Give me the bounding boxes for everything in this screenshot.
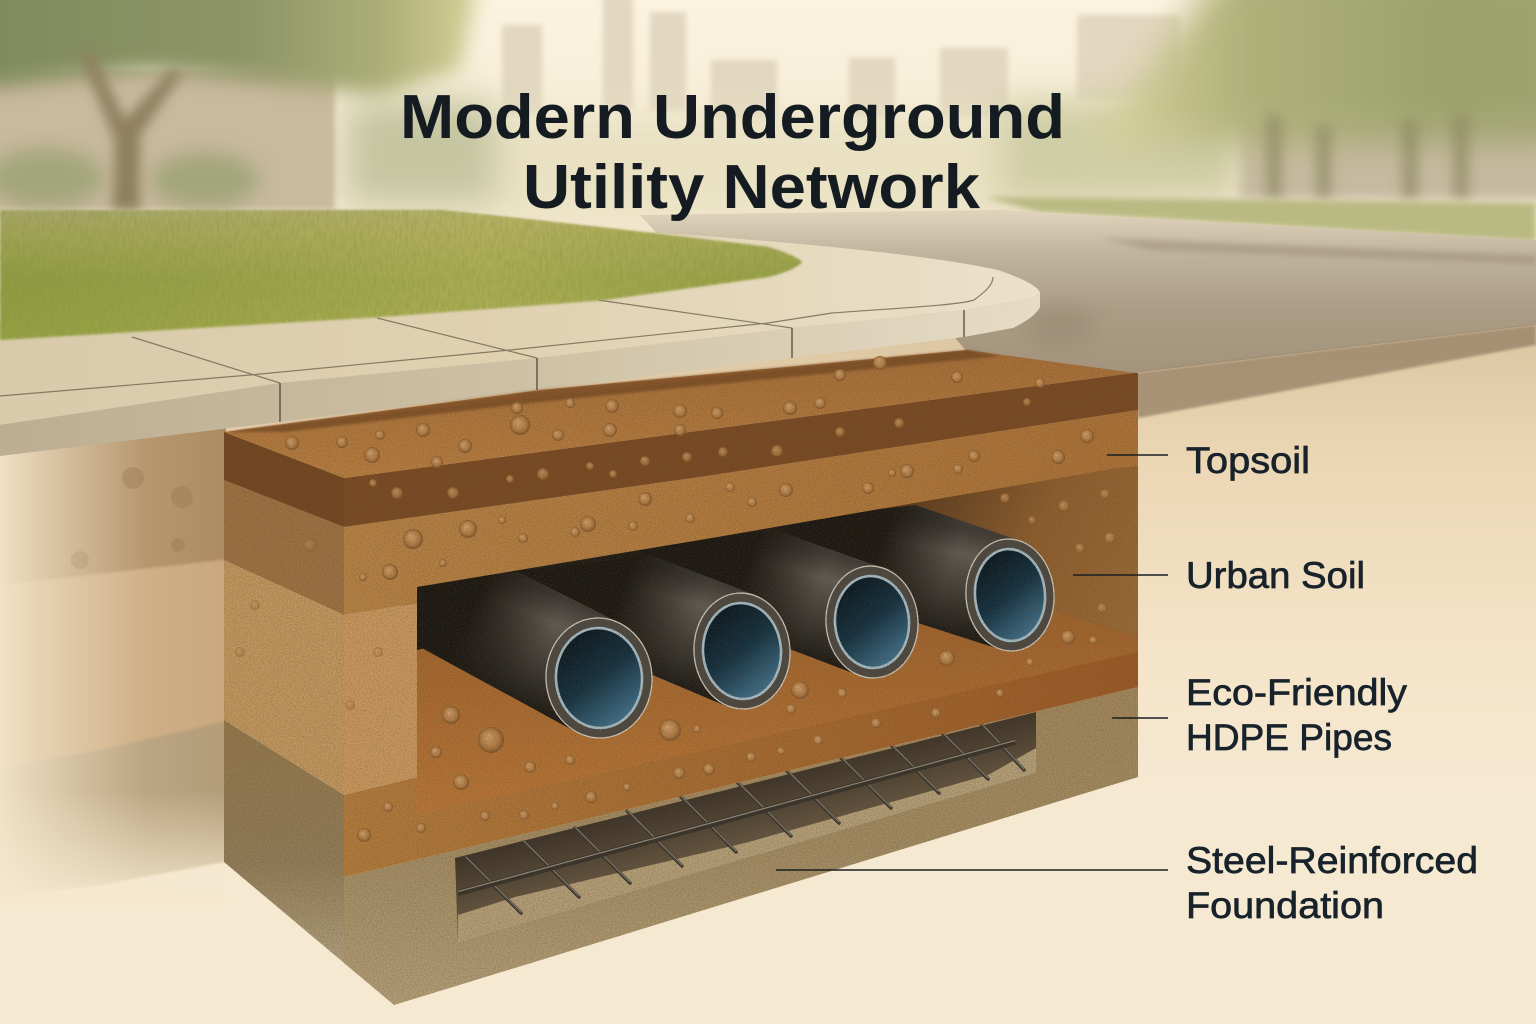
trench cross-section block — [200, 340, 1160, 1020]
foundation recess — [455, 712, 1036, 943]
pipe 3 — [640, 530, 922, 681]
title — [400, 83, 1065, 222]
paving joints — [0, 277, 993, 422]
pipe 1 — [400, 573, 656, 742]
urban band pebbles — [359, 429, 1094, 581]
curb front face — [0, 293, 1040, 456]
topsoil band pebbles — [303, 398, 1031, 552]
label: steel-reinforced foundation: Foundation — [1186, 885, 1384, 926]
topsoil left face — [224, 432, 344, 527]
recess sand strip — [458, 748, 1036, 943]
right trees — [1090, 0, 1536, 200]
hazy middle ground — [345, 100, 1240, 215]
soil grain texture — [200, 340, 1160, 1020]
label: urban soil: Urban Soil — [1186, 555, 1365, 596]
left building — [0, 70, 335, 210]
lawn — [0, 205, 810, 345]
road front cut face — [1133, 325, 1536, 418]
title: Utility Network — [523, 153, 981, 222]
urban soil front band — [344, 410, 1138, 615]
HDPE pipes — [400, 505, 1058, 742]
pipe 2 — [520, 555, 794, 712]
left cut-away wall — [0, 420, 240, 905]
left tree — [0, 0, 480, 210]
background scenery: distant city, trees and lawn — [0, 0, 1536, 242]
label: steel-reinforced foundation: Steel-Reinforced — [1186, 840, 1478, 881]
road — [640, 210, 1536, 418]
medium soil left face — [224, 480, 344, 615]
top surface pebbles — [285, 356, 1045, 468]
right lawn strip — [985, 197, 1536, 242]
foundation left face — [224, 720, 394, 1005]
back wall — [880, 460, 1138, 637]
label: eco-friendly HDPE pipes: HDPE Pipes — [1186, 717, 1392, 758]
pipe 4 — [790, 505, 1058, 654]
soil pebbles — [235, 356, 1116, 842]
label: steel-reinforced foundation — [776, 840, 1478, 926]
sidewalk top surface — [0, 232, 1040, 425]
label: eco-friendly HDPE pipes: Eco-Friendly — [1186, 672, 1408, 713]
floor pebbles — [430, 630, 1097, 790]
back wall pebbles — [1000, 489, 1116, 613]
foundation front face — [344, 687, 1138, 1005]
light soil front column — [344, 603, 417, 795]
hedges — [0, 148, 260, 208]
floor and front soil band — [344, 560, 1138, 877]
opening backdrop — [417, 460, 1138, 790]
distant city skyline — [502, 0, 1180, 120]
dark shadow along curb — [224, 350, 1000, 432]
label: topsoil: Topsoil — [1186, 440, 1310, 481]
label: eco-friendly HDPE pipes — [1112, 672, 1408, 758]
topsoil front band — [344, 373, 1138, 527]
topsoil top surface — [224, 350, 1133, 478]
light soil left face — [224, 560, 344, 795]
column pebbles — [235, 600, 383, 710]
steel reinforcement mesh — [458, 723, 1024, 913]
sidewalk and curb — [0, 232, 1040, 456]
front band pebbles — [357, 689, 1004, 842]
lower ground tone — [0, 325, 1536, 1024]
title: Modern Underground — [400, 83, 1065, 152]
